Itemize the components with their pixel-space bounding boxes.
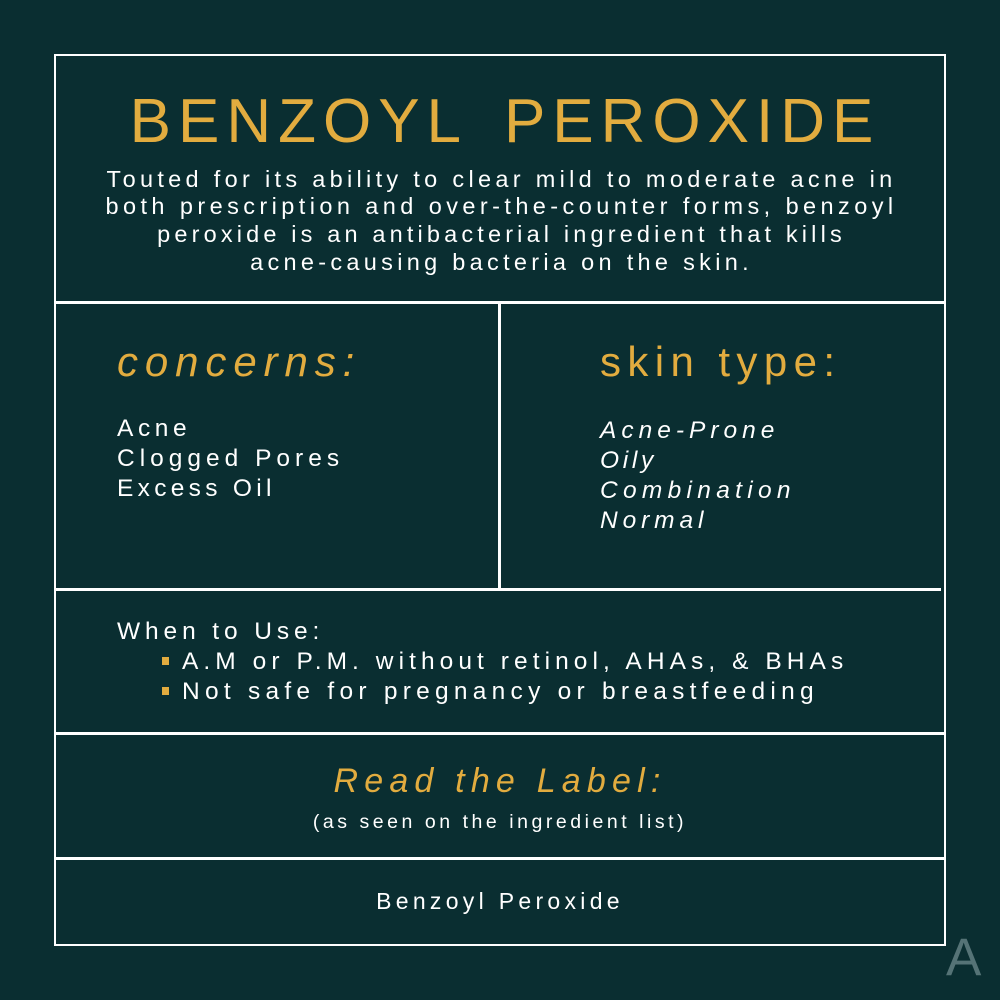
heading: skin type: skin type: [600, 338, 841, 385]
skin type list: Combination [600, 476, 796, 504]
when to use text: When to Use: [117, 618, 324, 644]
skin type list: Acne-Prone [600, 416, 779, 444]
logo mark: A [946, 928, 981, 987]
intro text: Touted for its ability to clear mild to moderate acne in [107, 166, 896, 192]
intro text: peroxide is an antibacterial ingredient that kills [157, 221, 846, 247]
concerns list [117, 415, 344, 502]
bullet list [162, 648, 848, 704]
bullet 2 text: Not safe for pregnancy or breastfeeding [182, 678, 819, 704]
outer frame [54, 54, 946, 946]
bullet 2 [162, 687, 169, 695]
heading: concerns: concerns: [117, 338, 361, 385]
ingredient name: Benzoyl Peroxide [376, 888, 624, 914]
intro text: both prescription and over-the-counter forms, benzoyl [105, 193, 898, 219]
concerns list: Excess Oil [117, 475, 276, 502]
title: BENZOYL PEROXIDE [130, 87, 880, 156]
heading: read the label: Read the Label: [333, 762, 667, 800]
skin type list: Normal [600, 506, 708, 534]
intro text [105, 166, 898, 275]
bullet 1 text: A.M or P.M. without retinol, AHAs, & BHAs [182, 648, 848, 674]
skin type list: Oily [600, 446, 657, 474]
bullet 1 [162, 657, 169, 665]
skin type list [598, 416, 796, 534]
intro text: acne-causing bacteria on the skin. [250, 249, 753, 275]
label subtext: (as seen on the ingredient list) [313, 811, 687, 833]
concerns list: Clogged Pores [117, 445, 344, 472]
concerns list: Acne [117, 415, 191, 442]
